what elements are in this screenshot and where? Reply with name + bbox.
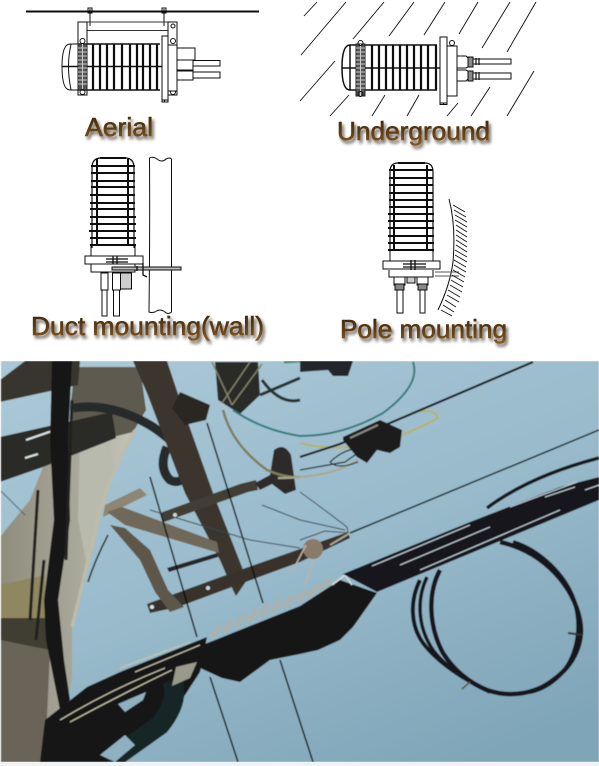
- heading: Aerial: Aerial: [85, 112, 153, 142]
- black cable loop near pole: [73, 407, 188, 482]
- sky: [0, 361, 599, 762]
- upper messenger wire: [300, 362, 533, 457]
- vertical cable bundle on pole: [44, 361, 72, 710]
- cable slack bottom left: [40, 637, 207, 762]
- diagram: aerial closure on strand: [26, 8, 259, 102]
- diagram: underground closure with soil hatching: [300, 2, 536, 116]
- panel: pole mounting: [340, 163, 507, 344]
- insulator on arm: [255, 447, 296, 494]
- diagram: vertical closure on pole: [383, 163, 467, 316]
- fibre cable bundle: [343, 458, 599, 592]
- thin vertical guy wires: [150, 423, 313, 762]
- heading: Duct mounting(wall): Duct mounting(wall): [31, 311, 264, 341]
- heading: Pole mounting: Pole mounting: [340, 314, 507, 344]
- crossarms at top left: [0, 361, 80, 402]
- top hardware: [172, 392, 210, 425]
- panel: duct mounting on wall: [31, 157, 264, 341]
- lower thin wires: [350, 430, 599, 533]
- panel: underground mounting: [300, 2, 536, 146]
- black closure body: [200, 580, 377, 682]
- panel: aerial mounting: [26, 8, 259, 142]
- diagram: vertical closure on duct wall: [85, 157, 181, 316]
- photo: aerial closure installed on utility pole: [0, 361, 599, 762]
- utility pole: [0, 430, 133, 762]
- strip below photo: [0, 762, 599, 766]
- tan braces: [103, 488, 147, 517]
- green and yellow wires: [233, 362, 414, 436]
- wire connector: [343, 420, 402, 463]
- heading: Underground: Underground: [337, 116, 490, 146]
- pale cable sleeve: [72, 430, 135, 627]
- steel arms: [147, 532, 350, 613]
- diagonal steel beam: [133, 361, 247, 596]
- coiled fibre cable: [413, 542, 582, 694]
